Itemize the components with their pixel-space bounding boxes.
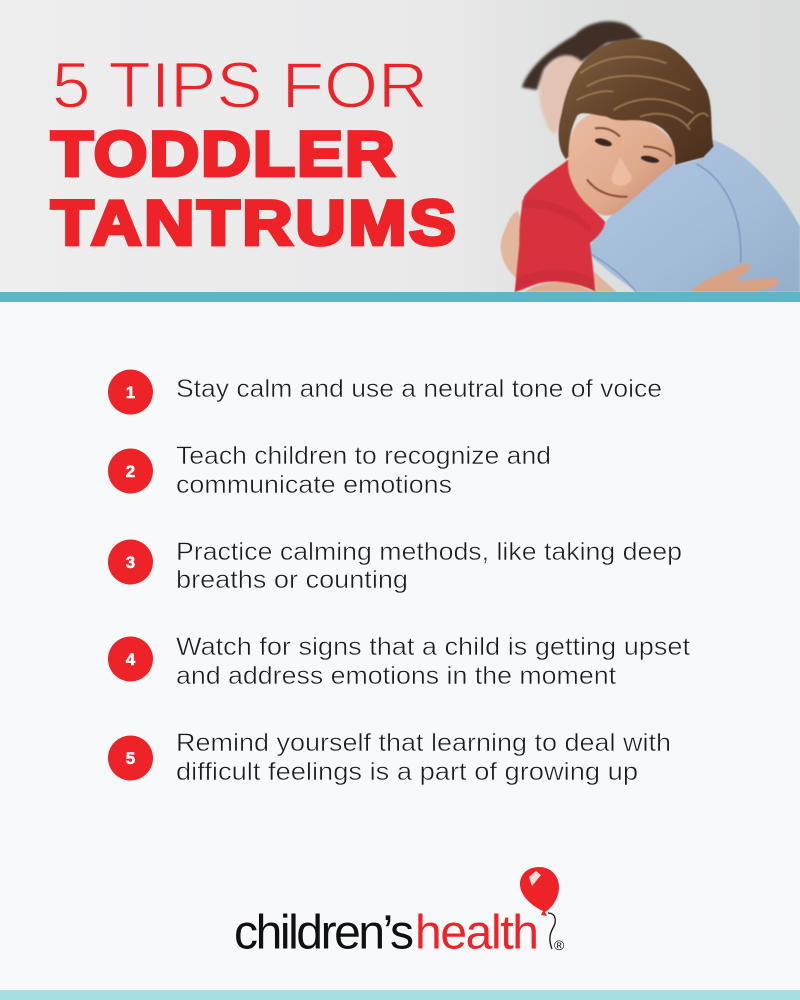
tip 5	[108, 729, 671, 786]
boy's hand	[691, 264, 778, 292]
icon: red balloon	[520, 867, 559, 949]
tip 2 text	[176, 442, 551, 499]
number badge 5: 5	[126, 749, 135, 768]
registered mark: ®	[554, 937, 565, 953]
eyes and brows	[594, 128, 672, 164]
tip 2 text: communicate emotions	[176, 471, 452, 499]
father's hand behind boy	[500, 210, 521, 278]
number badge 2: 2	[126, 462, 135, 481]
tip 3 text: breaths or counting	[176, 566, 408, 594]
bottom band	[0, 990, 800, 1000]
shirt shading	[515, 199, 595, 291]
father's head	[522, 21, 643, 135]
number badge 3: 3	[126, 553, 135, 572]
logo word: children's: children’s	[234, 906, 414, 960]
title	[51, 48, 458, 259]
number badge 4: 4	[126, 650, 136, 669]
tip 4	[108, 633, 690, 690]
boy's red shirt	[515, 159, 605, 292]
nose	[612, 157, 632, 186]
father's bare arm	[593, 272, 617, 292]
boy's arm	[525, 282, 595, 292]
tip 3 text: Practice calming methods, like taking deep	[176, 538, 682, 566]
tip 5 text	[176, 729, 671, 786]
smile	[587, 180, 627, 197]
number badge 1: 1	[126, 383, 135, 402]
tips list	[108, 370, 690, 786]
boy's hair	[559, 39, 713, 165]
number badge 3	[108, 540, 153, 584]
logo: children's health	[234, 867, 565, 960]
photo: father hugging smiling boy	[501, 21, 800, 292]
number badge 4	[108, 636, 153, 682]
shirt seams	[591, 164, 741, 292]
hero photo panel	[0, 0, 800, 292]
tip 2	[108, 442, 551, 499]
father's blue shirt	[589, 140, 800, 292]
boy's face	[568, 112, 676, 215]
tip 2 text: Teach children to recognize and	[176, 442, 551, 470]
tip 3	[108, 538, 682, 594]
tip 1	[108, 370, 662, 414]
tip 4 text: Watch for signs that a child is getting upset	[176, 633, 690, 661]
title line 3: TANTRUMS: TANTRUMS	[51, 189, 458, 259]
hair highlights	[577, 57, 708, 130]
tip 1 text: Stay calm and use a neutral tone of voice	[176, 375, 662, 403]
number badge 5	[108, 736, 153, 780]
title line 2: TODDLER: TODDLER	[51, 118, 397, 189]
tip 4 text: and address emotions in the moment	[176, 662, 616, 690]
tip 3 text	[176, 538, 682, 594]
title line 1: 5 TIPS FOR: 5 TIPS FOR	[52, 48, 428, 122]
tip 5 text: Remind yourself that learning to deal with	[176, 729, 671, 757]
number badge 1	[108, 370, 153, 414]
tip 5 text: difficult feelings is a part of growing up	[176, 758, 638, 786]
tip 4 text	[176, 633, 690, 690]
number badge 2	[108, 448, 153, 494]
logo word: health: health	[415, 906, 539, 960]
teal divider band	[0, 292, 800, 302]
wall background	[0, 0, 800, 292]
